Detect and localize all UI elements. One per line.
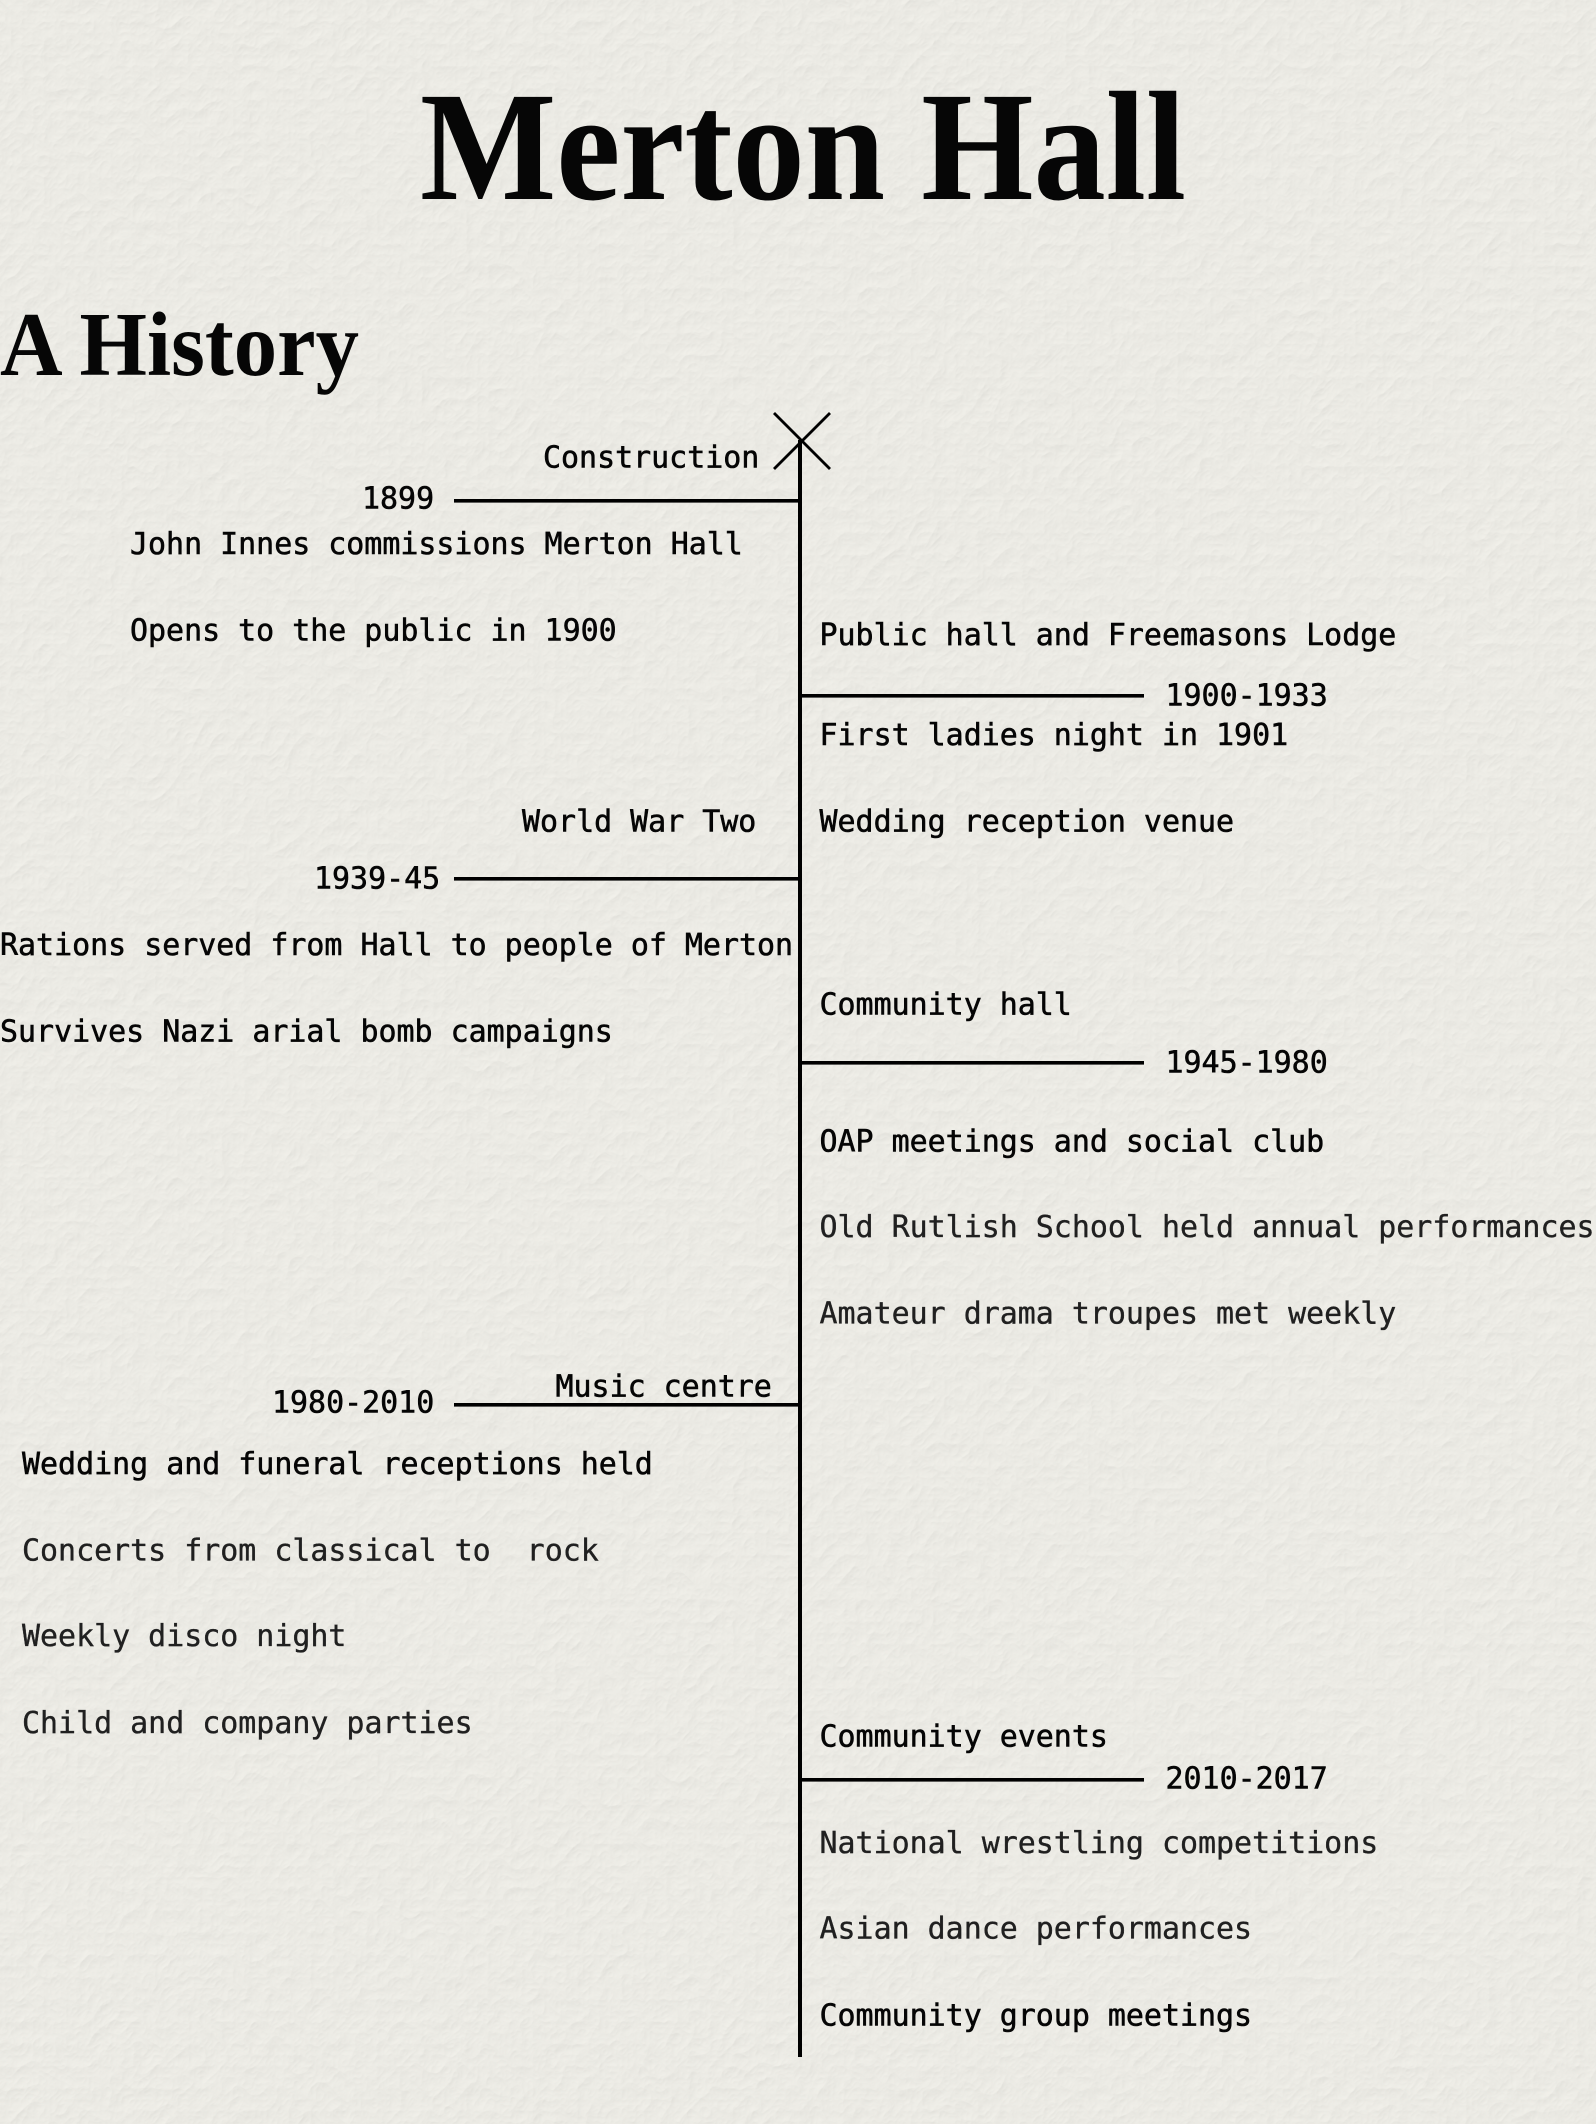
entry: 1939-45 World War Two bbox=[0, 804, 800, 1050]
entry: 2010-2017 community events: 2010-2017 bbox=[1166, 1762, 1328, 1796]
entry: 1939-45 World War Two: Survives Nazi arial bomb campaigns bbox=[0, 1014, 613, 1050]
entry: 1945-1980 community hall: Old Rutlish School held annual performances bbox=[820, 1210, 1595, 1245]
entry: 1980-2010 music centre: Wedding and funeral receptions held bbox=[22, 1447, 653, 1482]
entry: 1945-1980 community hall: OAP meetings and social club bbox=[820, 1124, 1324, 1160]
subtitle: A History bbox=[0, 294, 359, 395]
title: Merton Hall bbox=[420, 60, 1186, 233]
entry: 1939-45 World War Two: 1939-45 bbox=[314, 862, 440, 896]
entry: 1900-1933 public hall: First ladies night in 1901 bbox=[820, 718, 1288, 753]
entry: 1900-1933 public hall: 1900-1933 bbox=[1166, 678, 1328, 714]
entry: 2010-2017 community events bbox=[800, 1720, 1378, 2034]
entry: 1939-45 World War Two: World War Two bbox=[522, 804, 756, 840]
icon: cross at start of timeline bbox=[774, 413, 830, 469]
entry: 1945-1980 community hall: Amateur drama troupes met weekly bbox=[820, 1296, 1396, 1332]
entry: 1900-1933 public hall bbox=[800, 618, 1396, 840]
entry: 1939-45 World War Two: Rations served from Hall to people of Merton bbox=[0, 928, 793, 963]
entry: 2010-2017 community events: Asian dance performances bbox=[820, 1912, 1252, 1946]
entry: 2010-2017 community events: Community group meetings bbox=[820, 1998, 1252, 2034]
entry: 1980-2010 music centre: Weekly disco night bbox=[22, 1619, 346, 1654]
entry: 1945-1980 community hall: Community hall bbox=[820, 988, 1072, 1022]
entry: 1900-1933 public hall: Wedding reception venue bbox=[820, 804, 1234, 840]
entry: 1945-1980 community hall bbox=[800, 988, 1595, 1332]
entry: 1899 construction bbox=[130, 440, 800, 648]
timeline axis bbox=[798, 440, 802, 2057]
entry: 2010-2017 community events: Community events bbox=[820, 1720, 1108, 1754]
entry: 1980-2010 music centre: 1980-2010 bbox=[272, 1386, 434, 1420]
entry: 1945-1980 community hall: 1945-1980 bbox=[1166, 1046, 1328, 1080]
entry: 1900-1933 public hall: Public hall and Freemasons Lodge bbox=[820, 618, 1396, 653]
entry: 1980-2010 music centre: Child and company parties bbox=[22, 1706, 473, 1741]
entry: 1899 construction: Opens to the public in 1900 bbox=[130, 614, 617, 648]
timeline bbox=[0, 413, 1595, 2057]
entry: 1899 construction: John Innes commissions Merton Hall bbox=[130, 527, 743, 562]
entry: 1899 construction: Construction bbox=[543, 440, 759, 476]
entry: 1980-2010 music centre: Concerts from classical to rock bbox=[22, 1534, 599, 1568]
entry: 1980-2010 music centre: Music centre bbox=[556, 1370, 772, 1404]
entry: 1899 construction: 1899 bbox=[362, 482, 434, 516]
entry: 1980-2010 music centre bbox=[22, 1370, 800, 1741]
entry: 2010-2017 community events: National wrestling competitions bbox=[820, 1826, 1378, 1861]
